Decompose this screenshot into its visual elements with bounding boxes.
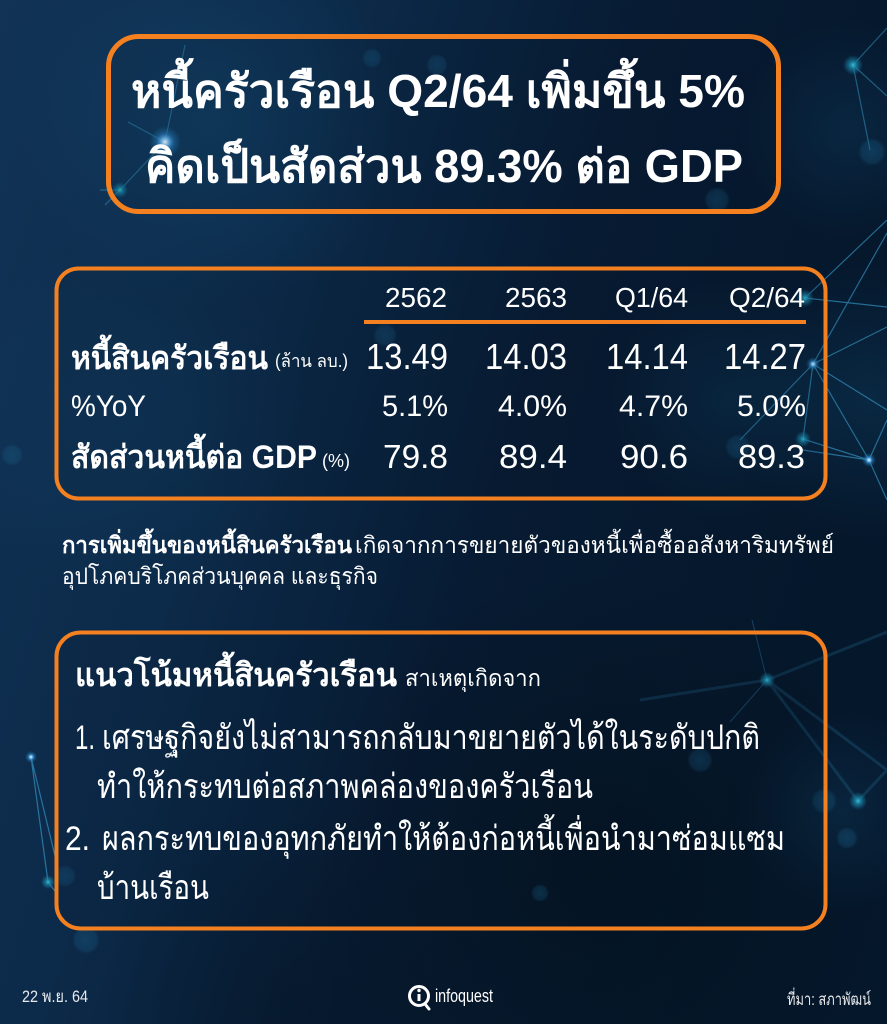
explanatory paragraph: อุปโภคบริโภคส่วนบุคคล และธุรกิจ <box>62 563 378 590</box>
cause 1: เศรษฐกิจยังไม่สามารถกลับมาขยายตัวได้ในระดับปกติ <box>102 718 760 758</box>
table header years: 2562 <box>385 282 447 313</box>
panel: debt trend causes <box>56 632 826 928</box>
table header years <box>385 282 805 313</box>
infoquest logo <box>410 986 493 1009</box>
cause 2: 2. <box>65 820 90 858</box>
row: YoY: 4.7% <box>619 390 688 423</box>
panel heading <box>75 651 541 693</box>
explanatory paragraph <box>62 528 834 590</box>
icon: magnifier i <box>410 986 429 1009</box>
header underline <box>364 320 806 324</box>
row: household debt: 14.14 <box>606 336 688 377</box>
cause 1: ทำให้กระทบต่อสภาพคล่องของครัวเรือน <box>97 767 593 806</box>
date: 22 พ.ย. 64 <box>22 987 88 1006</box>
row: household debt: (ล้าน ลบ.) <box>275 351 348 371</box>
cause 1 <box>75 718 760 806</box>
cause 2 <box>65 814 785 907</box>
row: debt to GDP: 89.4 <box>499 438 567 475</box>
title panel <box>108 36 778 212</box>
cause 1: 1. <box>75 719 95 757</box>
explanatory paragraph: เกิดจากการขยายตัวของหนี้เพื่อซื้ออสังหาริมทรัพย์ <box>355 529 834 558</box>
row: debt to GDP: (%) <box>322 451 350 471</box>
row: YoY: 5.0% <box>737 390 806 423</box>
row: household debt: หนี้สินครัวเรือน <box>71 334 268 376</box>
row: debt to GDP <box>71 433 805 475</box>
title line 1: หนี้ครัวเรือน Q2/64 เพิ่มขึ้น 5% <box>131 57 745 117</box>
infoquest logo: infoquest <box>435 986 493 1006</box>
panel heading: สาเหตุเกิดจาก <box>405 665 541 692</box>
row: household debt: 13.49 <box>366 336 448 377</box>
row: debt to GDP: 90.6 <box>620 438 688 475</box>
row: household debt <box>71 334 806 377</box>
row: YoY <box>71 390 806 423</box>
row: YoY: %YoY <box>71 390 146 423</box>
explanatory paragraph: การเพิ่มขึ้นของหนี้สินครัวเรือน <box>62 528 352 558</box>
row: household debt: 14.27 <box>724 336 806 377</box>
panel: debt table <box>56 268 826 498</box>
row: debt to GDP: 89.3 <box>738 438 805 475</box>
cause 2: ผลกระทบของอุทกภัยทำให้ต้องก่อหนี้เพื่อนำมาซ่อมแซม <box>102 814 785 859</box>
table header years: 2563 <box>505 282 567 313</box>
row: debt to GDP: 79.8 <box>383 438 448 475</box>
table header years: Q1/64 <box>615 282 688 313</box>
row: household debt: 14.03 <box>485 336 567 377</box>
row: debt to GDP: สัดส่วนหนี้ต่อ GDP <box>71 433 317 475</box>
row: YoY: 4.0% <box>498 390 567 423</box>
row: YoY: 5.1% <box>382 390 448 423</box>
cause 2: บ้านเรือน <box>97 869 209 907</box>
panel heading: แนวโน้มหนี้สินครัวเรือน <box>75 651 397 693</box>
title line 2: คิดเป็นสัดส่วน 89.3% ต่อ GDP <box>145 138 743 192</box>
table header years: Q2/64 <box>729 282 805 313</box>
